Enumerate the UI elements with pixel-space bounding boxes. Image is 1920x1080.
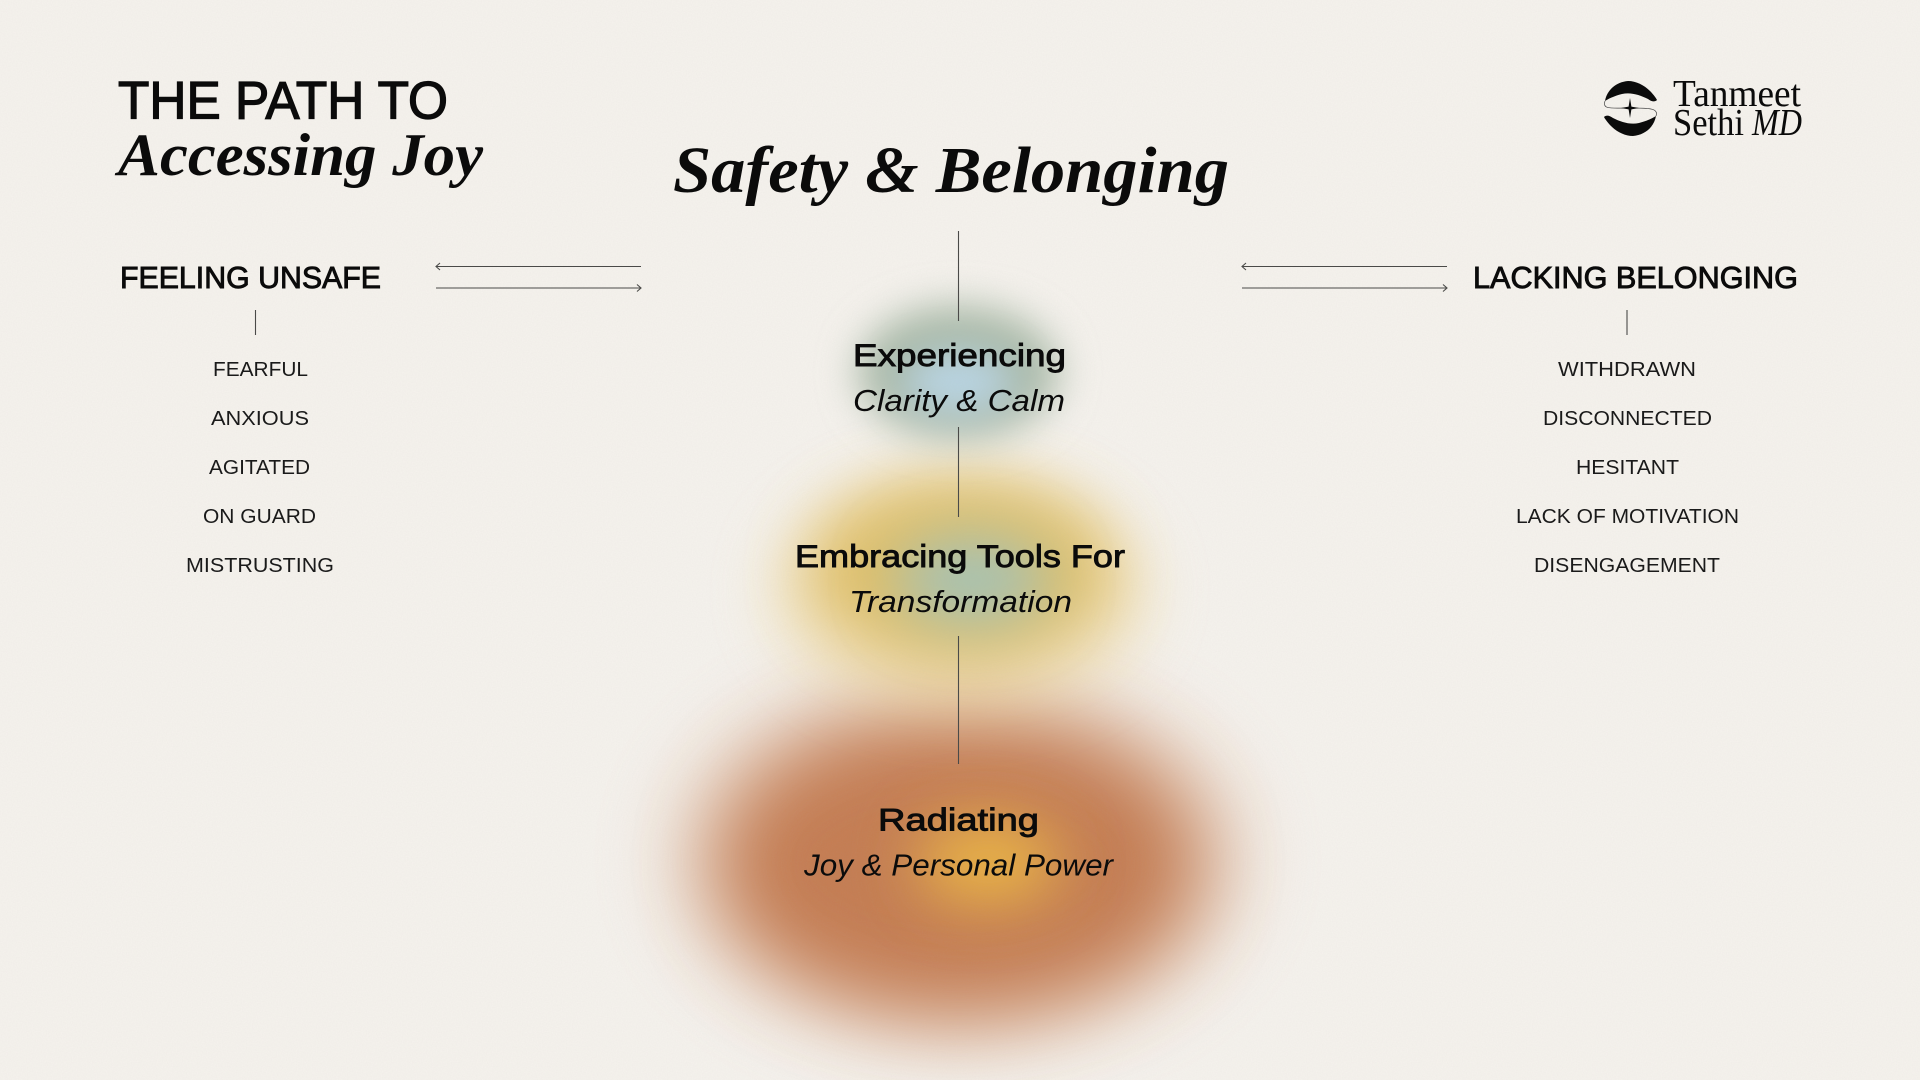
list: unsafe states: FEARFUL xyxy=(213,359,308,381)
centre connector lines xyxy=(958,231,960,764)
heading: lacking belonging: LACKING BELONGING xyxy=(1473,261,1798,295)
list: disconnected states xyxy=(1516,359,1739,577)
label: embracing tools for transformation xyxy=(795,538,1125,619)
label: embracing tools for transformation: Transformation xyxy=(849,584,1072,619)
list: unsafe states: AGITATED xyxy=(209,457,310,479)
label: embracing tools for transformation: Embracing Tools For xyxy=(795,538,1125,574)
connector xyxy=(1626,310,1628,335)
label: radiating joy and personal power xyxy=(803,802,1115,882)
label: experiencing clarity and calm xyxy=(853,337,1066,418)
list: unsafe states: ANXIOUS xyxy=(211,408,309,430)
title: Accessing Joy xyxy=(114,122,483,188)
connector xyxy=(254,310,256,335)
logo wordmark: Tanmeet xyxy=(1673,73,1801,115)
list: disconnected states: LACK OF MOTIVATION xyxy=(1516,506,1739,528)
arrows: left and right xyxy=(1242,263,1447,292)
list: unsafe states xyxy=(186,359,334,577)
logo wordmark xyxy=(1673,73,1802,144)
arrows: left and right xyxy=(436,263,641,292)
panel: lacking belonging xyxy=(1242,261,1798,577)
heading: feeling unsafe: FEELING UNSAFE xyxy=(120,261,381,295)
heading: Safety & Belonging: Safety & Belonging xyxy=(673,134,1229,207)
logo wordmark: Sethi xyxy=(1673,102,1744,144)
list: disconnected states: DISCONNECTED xyxy=(1543,408,1712,430)
glow: clarity and calm (blue) xyxy=(858,306,1058,438)
list: disconnected states: HESITANT xyxy=(1576,457,1679,479)
label: experiencing clarity and calm: Clarity & Calm xyxy=(853,383,1065,418)
icon: cupped hands with star xyxy=(1604,81,1657,136)
glow: transformation (yellow) xyxy=(772,472,1148,708)
label: experiencing clarity and calm: Experiencing xyxy=(853,337,1066,373)
logo wordmark: MD xyxy=(1751,102,1802,144)
list: disconnected states: WITHDRAWN xyxy=(1558,359,1696,381)
glow: radiating joy (orange) xyxy=(670,673,1246,1043)
title xyxy=(114,72,483,188)
title: THE PATH TO xyxy=(118,72,448,130)
logo: Tanmeet Sethi MD xyxy=(1604,73,1802,144)
list: unsafe states: ON GUARD xyxy=(203,506,316,528)
label: radiating joy and personal power: Joy & Personal Power xyxy=(803,848,1115,882)
list: disconnected states: DISENGAGEMENT xyxy=(1534,555,1720,577)
label: radiating joy and personal power: Radiating xyxy=(878,802,1039,838)
panel: feeling unsafe xyxy=(120,261,641,577)
list: unsafe states: MISTRUSTING xyxy=(186,555,334,577)
